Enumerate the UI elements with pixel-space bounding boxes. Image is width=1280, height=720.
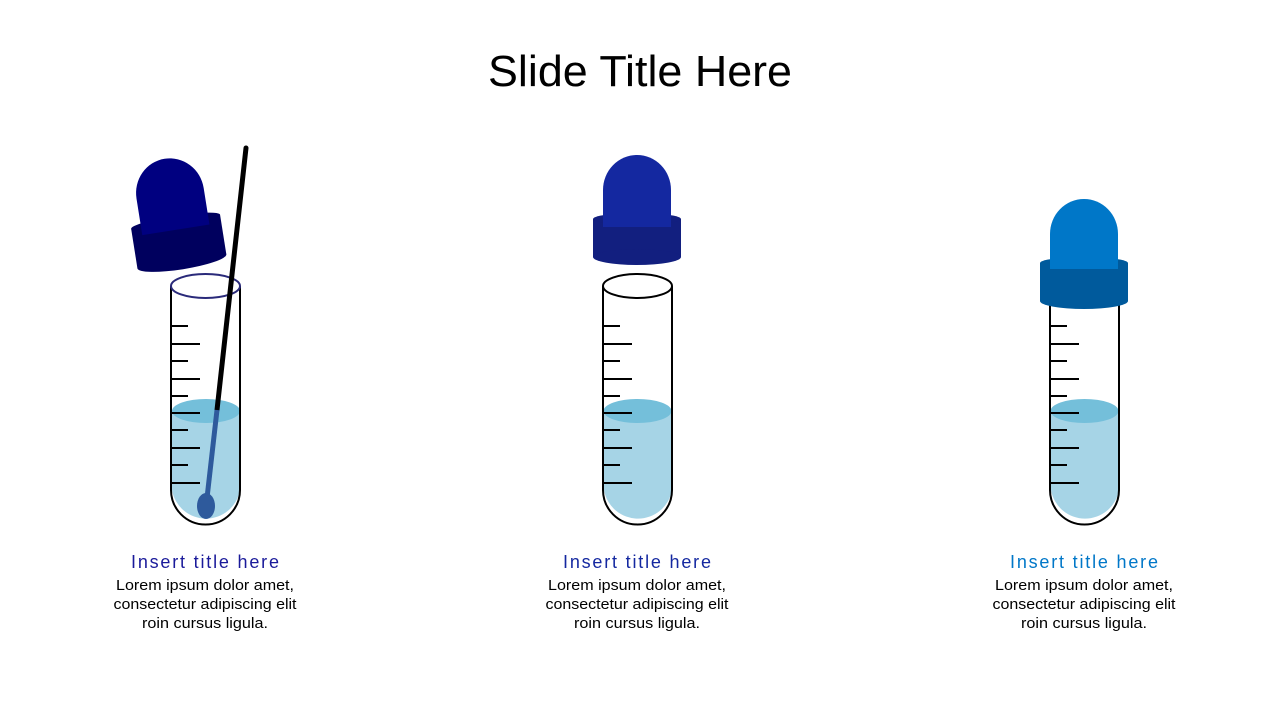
text block 2: Lorem ipsum dolor amet, <box>548 577 726 594</box>
text block 1: Lorem ipsum dolor amet, <box>116 577 294 594</box>
text block 1: Insert title here <box>131 552 279 572</box>
text block 3 <box>992 552 1176 632</box>
text block 2: Insert title here <box>563 552 711 572</box>
text block 1: consectetur adipiscing elit <box>114 596 297 613</box>
cap 2 <box>593 155 681 265</box>
title: Slide Title Here <box>488 47 792 96</box>
cap 1 <box>121 152 228 276</box>
text block 1: roin cursus ligula. <box>142 615 268 632</box>
text block 3: Insert title here <box>1010 552 1158 572</box>
tube 3 <box>1050 286 1119 524</box>
text block 3: Lorem ipsum dolor amet, <box>995 577 1173 594</box>
text block 2 <box>546 552 729 632</box>
text block 3: roin cursus ligula. <box>1021 615 1147 632</box>
swab <box>197 148 246 519</box>
text block 1 <box>114 552 297 632</box>
tube 1 with swab <box>171 148 246 524</box>
text block 2: roin cursus ligula. <box>574 615 700 632</box>
liquid 1 <box>172 411 240 519</box>
text block 3: consectetur adipiscing elit <box>992 596 1176 613</box>
tube 2 <box>603 274 672 524</box>
cap 3 <box>1040 199 1128 309</box>
text block 2: consectetur adipiscing elit <box>546 596 729 613</box>
